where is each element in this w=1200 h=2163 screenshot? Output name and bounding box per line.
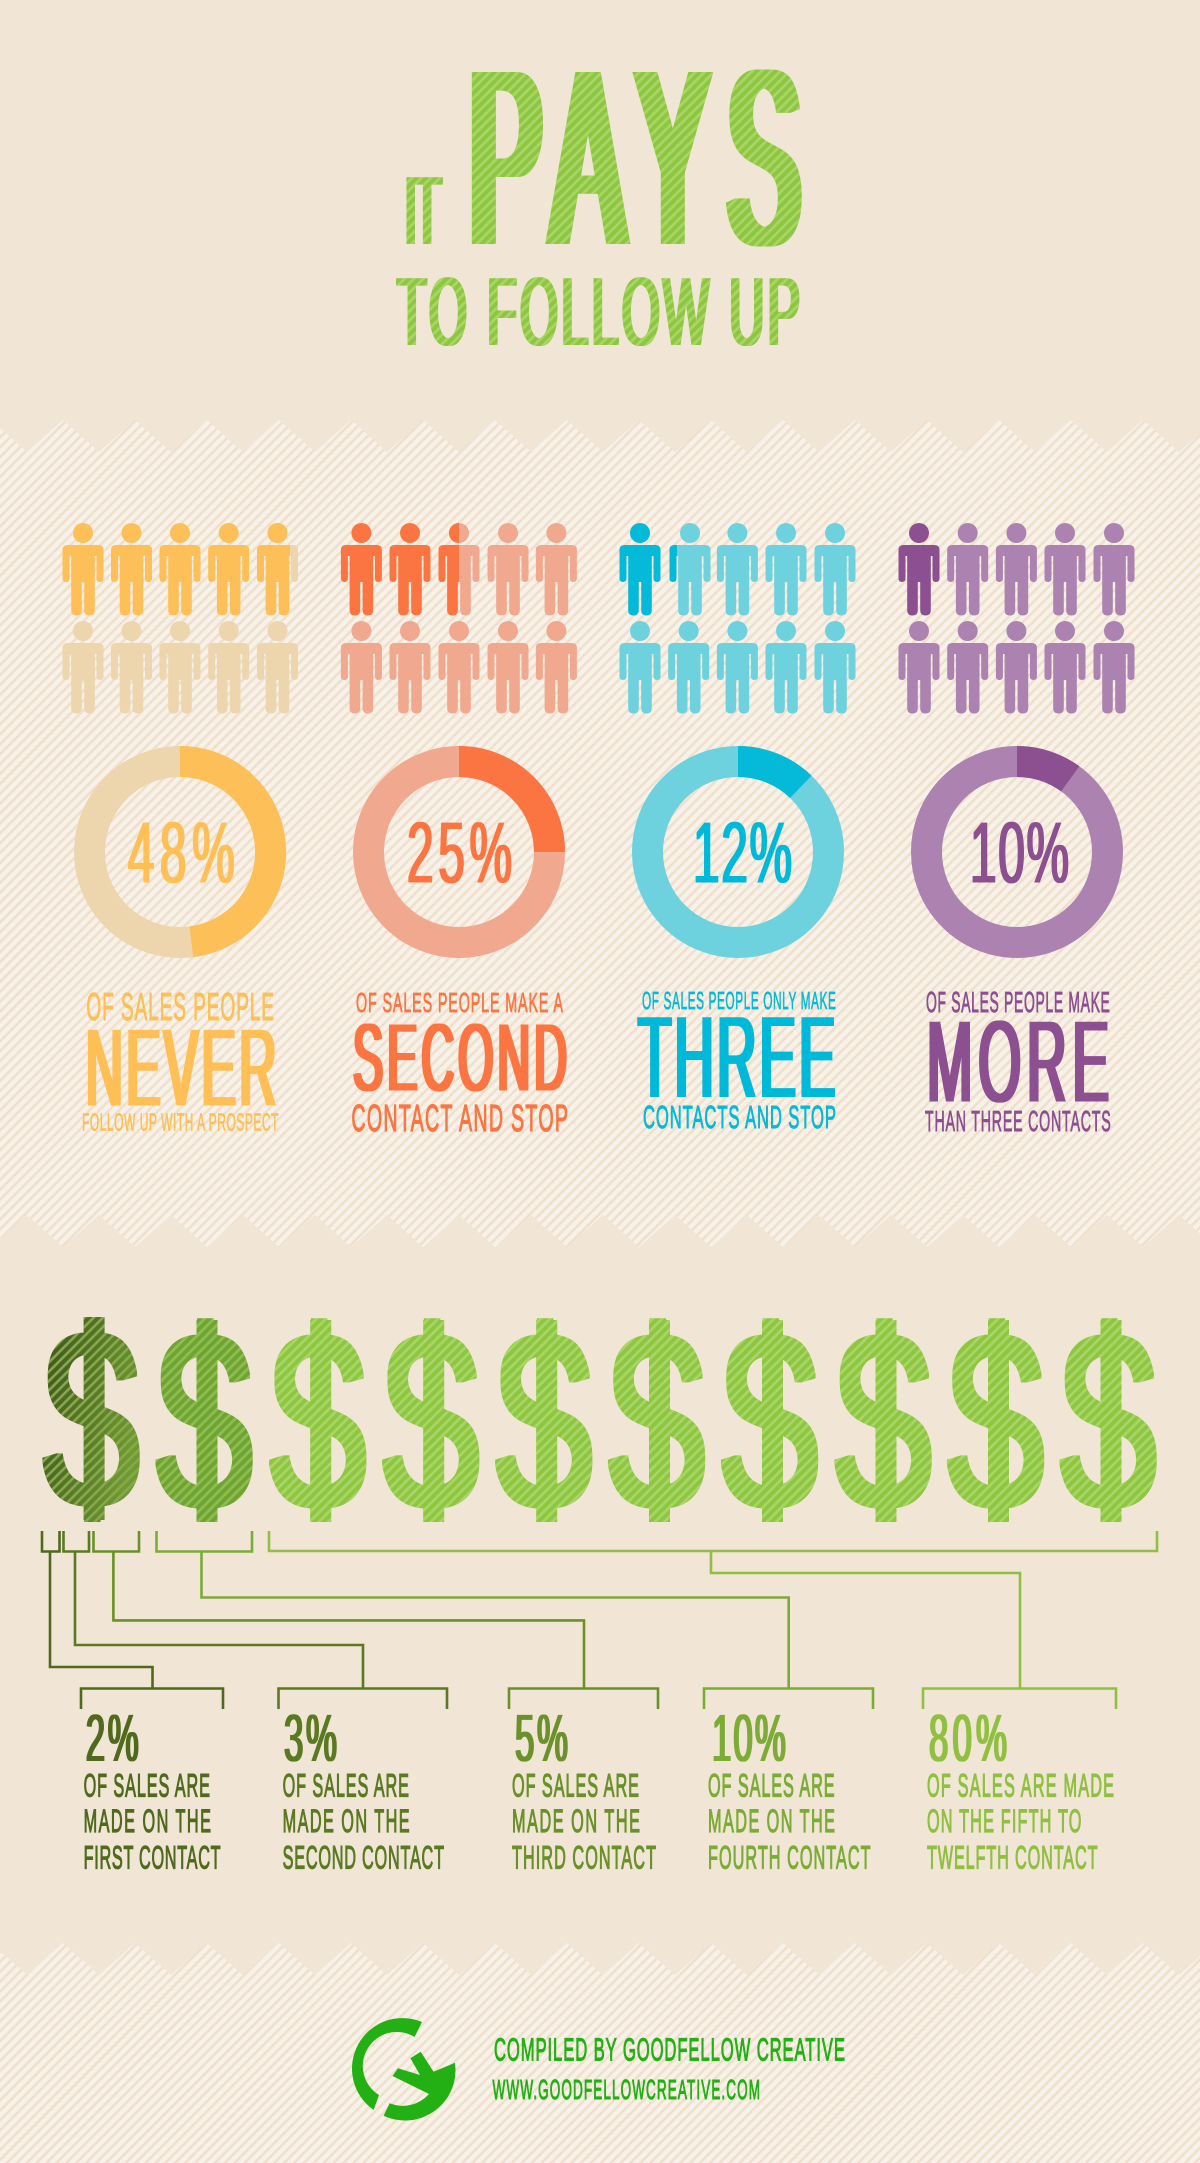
people icons: orange: [341, 523, 577, 714]
caption: 3%: 3%: [284, 1701, 337, 1776]
caption: 10%: OF SALES ARE: [708, 1768, 835, 1804]
caption: 3%: [283, 1701, 444, 1876]
row of ten dollar signs: [44, 1277, 1156, 1564]
icons: dollars 3 to 10: $: [609, 1279, 705, 1564]
footer credit: [492, 2032, 845, 2105]
striped band: statistics section: [0, 420, 1200, 1247]
people icons: blue: [620, 523, 856, 714]
text block: never: NEVER: [86, 1007, 276, 1130]
caption: 10%: [708, 1701, 871, 1876]
caption: 5%: THIRD CONTACT: [512, 1840, 656, 1876]
icon: dollar 2: $: [156, 1279, 252, 1564]
caption: 5%: OF SALES ARE: [512, 1768, 639, 1804]
icon: Goodfellow logo: [352, 2018, 456, 2120]
caption: 80%: ON THE FIFTH TO: [927, 1803, 1081, 1839]
icon: dollar 1 (first contacts): $: [44, 1277, 140, 1562]
donut chart: 10%: [926, 762, 1108, 942]
panel: 10% more: [898, 523, 1134, 1138]
icons: dollars 3 to 10: $: [270, 1279, 366, 1564]
text block: second: SECOND: [353, 1005, 567, 1112]
panel: 25% second: [341, 523, 577, 1140]
connector: third contact: [94, 1531, 658, 1709]
donut chart: 25%: [368, 762, 550, 942]
connector: second contact: [64, 1531, 447, 1709]
caption: 80%: [927, 1701, 1114, 1876]
percent: 12%: 12%: [693, 805, 792, 902]
panel: 12% three: [620, 523, 856, 1135]
title: [397, 18, 800, 366]
striped band: footer: [0, 1943, 1200, 2163]
donut chart: 12%: [648, 762, 828, 942]
text block: never: OF SALES PEOPLE: [86, 986, 274, 1029]
percent: 25%: 25%: [407, 805, 512, 902]
icons: dollars 3 to 10: $: [722, 1279, 818, 1564]
caption: 2%: 2%: [86, 1701, 139, 1776]
caption: 5%: 5%: [515, 1701, 568, 1776]
caption: 3%: SECOND CONTACT: [283, 1840, 444, 1876]
text block: three: OF SALES PEOPLE ONLY MAKE: [642, 988, 836, 1015]
panel: 48% never: [62, 523, 298, 1137]
people icons: purple: [898, 523, 1134, 714]
percent: 48%: 48%: [128, 805, 235, 902]
caption: 80%: OF SALES ARE MADE: [927, 1768, 1114, 1804]
text block: second: [351, 987, 568, 1140]
icons: dollars 3 to 10: [270, 1279, 1156, 1564]
connector: fifth to twelfth contact: [269, 1531, 1157, 1709]
caption: 5%: [512, 1701, 656, 1876]
title: IT: [404, 156, 442, 265]
people icons: yellow: [62, 523, 298, 714]
icon: dollar 2: [156, 1279, 252, 1564]
icons: dollars 3 to 10: $: [948, 1279, 1044, 1564]
footer credit: WWW.GOODFELLOWCREATIVE.COM: [492, 2074, 760, 2105]
icons: dollars 3 to 10: $: [496, 1279, 592, 1564]
caption: 10%: 10%: [712, 1701, 786, 1776]
icons: dollars 3 to 10: $: [383, 1279, 479, 1564]
text block: never: FOLLOW UP WITH A PROSPECT: [82, 1110, 278, 1137]
text block: more: MORE: [927, 997, 1109, 1127]
icons: dollars 3 to 10: $: [1060, 1279, 1156, 1564]
text block: more: THAN THREE CONTACTS: [925, 1106, 1111, 1138]
caption: 2%: FIRST CONTACT: [84, 1840, 221, 1876]
caption: 10%: MADE ON THE: [708, 1803, 835, 1839]
caption: 80%: 80%: [929, 1701, 1007, 1776]
text block: second: CONTACT AND STOP: [351, 1098, 568, 1140]
caption: 10%: FOURTH CONTACT: [708, 1840, 871, 1876]
text block: second: OF SALES PEOPLE MAKE A: [356, 987, 563, 1018]
connector: first contact: [42, 1531, 223, 1709]
caption: 2%: OF SALES ARE: [84, 1768, 210, 1804]
caption: 80%: TWELFTH CONTACT: [927, 1840, 1098, 1876]
caption: 2%: [84, 1701, 221, 1876]
title: TO FOLLOW UP: [397, 257, 800, 366]
icon: dollar 1 (first contacts): [44, 1277, 140, 1562]
text block: three: THREE: [638, 992, 835, 1122]
icons: dollars 3 to 10: $: [836, 1279, 932, 1564]
percent: 10%: 10%: [970, 805, 1069, 902]
caption: 2%: MADE ON THE: [84, 1803, 211, 1839]
connector: fourth contact: [156, 1531, 873, 1709]
footer credit: COMPILED BY GOODFELLOW CREATIVE: [494, 2032, 845, 2068]
title: PAYS: [470, 18, 800, 297]
caption: 5%: MADE ON THE: [512, 1803, 640, 1839]
text block: more: OF SALES PEOPLE MAKE: [926, 987, 1110, 1019]
donut chart: 48%: [90, 761, 271, 942]
caption: 3%: MADE ON THE: [283, 1803, 410, 1839]
caption: 3%: OF SALES ARE: [283, 1768, 409, 1804]
text block: three: CONTACTS AND STOP: [643, 1099, 836, 1135]
